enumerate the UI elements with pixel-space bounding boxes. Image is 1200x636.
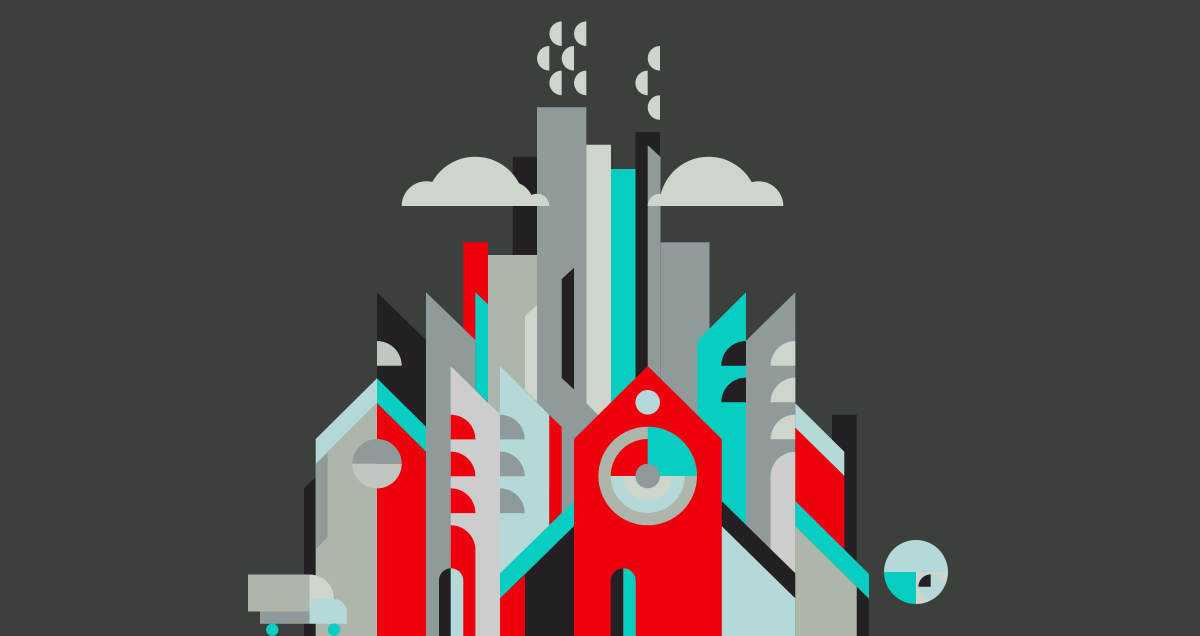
teal band: [795, 501, 869, 599]
black back tower: [513, 157, 538, 267]
left cloud: [402, 156, 550, 206]
small round window: [635, 390, 660, 415]
smoke: left chimney: [537, 21, 586, 95]
pale arch windows: [771, 341, 795, 439]
red arch windows: [451, 415, 475, 636]
delivery truck: [248, 574, 347, 636]
red wall: [377, 403, 426, 636]
pale roof: [316, 378, 377, 464]
black lower strip: [857, 584, 869, 636]
red back tower: [463, 242, 488, 365]
lower black block: [525, 526, 574, 636]
teal roof: [377, 378, 426, 452]
black slit: [562, 268, 574, 390]
central red house: [574, 366, 722, 636]
black diagonal band: [722, 501, 795, 598]
black side wall: [304, 477, 316, 636]
left house: [304, 378, 426, 636]
teal sliver: [475, 292, 488, 402]
right cloud: [648, 156, 784, 206]
sage wall: [316, 403, 377, 636]
pale blue building: [500, 366, 574, 636]
chassis: [260, 612, 310, 624]
door: [611, 568, 636, 636]
pale roof: [795, 403, 844, 476]
black rear tower: [832, 415, 857, 580]
teal tower: [611, 169, 636, 439]
quarter window: [377, 341, 402, 366]
light grey arched building: [439, 366, 500, 636]
black narrow tower: [636, 132, 660, 402]
illustration: geometric city: [248, 21, 948, 636]
round tree icon: [884, 540, 948, 604]
door: [439, 568, 463, 636]
teal right building: [697, 292, 746, 530]
cab window: [310, 574, 334, 599]
smoke: right chimney: [635, 46, 660, 120]
grey right tower: [660, 242, 710, 442]
grey arch windows: [500, 415, 525, 513]
grey right gable building: [746, 292, 795, 576]
lower red block: [500, 575, 525, 636]
pale sliver: [525, 304, 538, 402]
black arch windows: [721, 341, 746, 402]
cab: [310, 599, 347, 624]
red strip: [549, 415, 562, 525]
wheels: [266, 624, 340, 636]
red wall: [795, 428, 844, 552]
clock wheel: [598, 427, 697, 525]
round window: [352, 439, 402, 488]
sage wall: [795, 526, 857, 636]
light tower: [586, 145, 611, 440]
pale lower-right block: [722, 526, 795, 636]
grey gable building: [426, 292, 475, 636]
light grey arch: [771, 452, 795, 576]
back towers: [463, 107, 710, 530]
grey inset: [316, 453, 328, 549]
teal diagonal band: [500, 501, 574, 598]
left black gable: [377, 292, 426, 430]
right house: [795, 403, 869, 636]
cargo box: [248, 574, 310, 612]
grey narrow tower: [648, 145, 660, 420]
tall grey chimney tower: [537, 107, 598, 530]
sage back tower: [488, 255, 538, 420]
